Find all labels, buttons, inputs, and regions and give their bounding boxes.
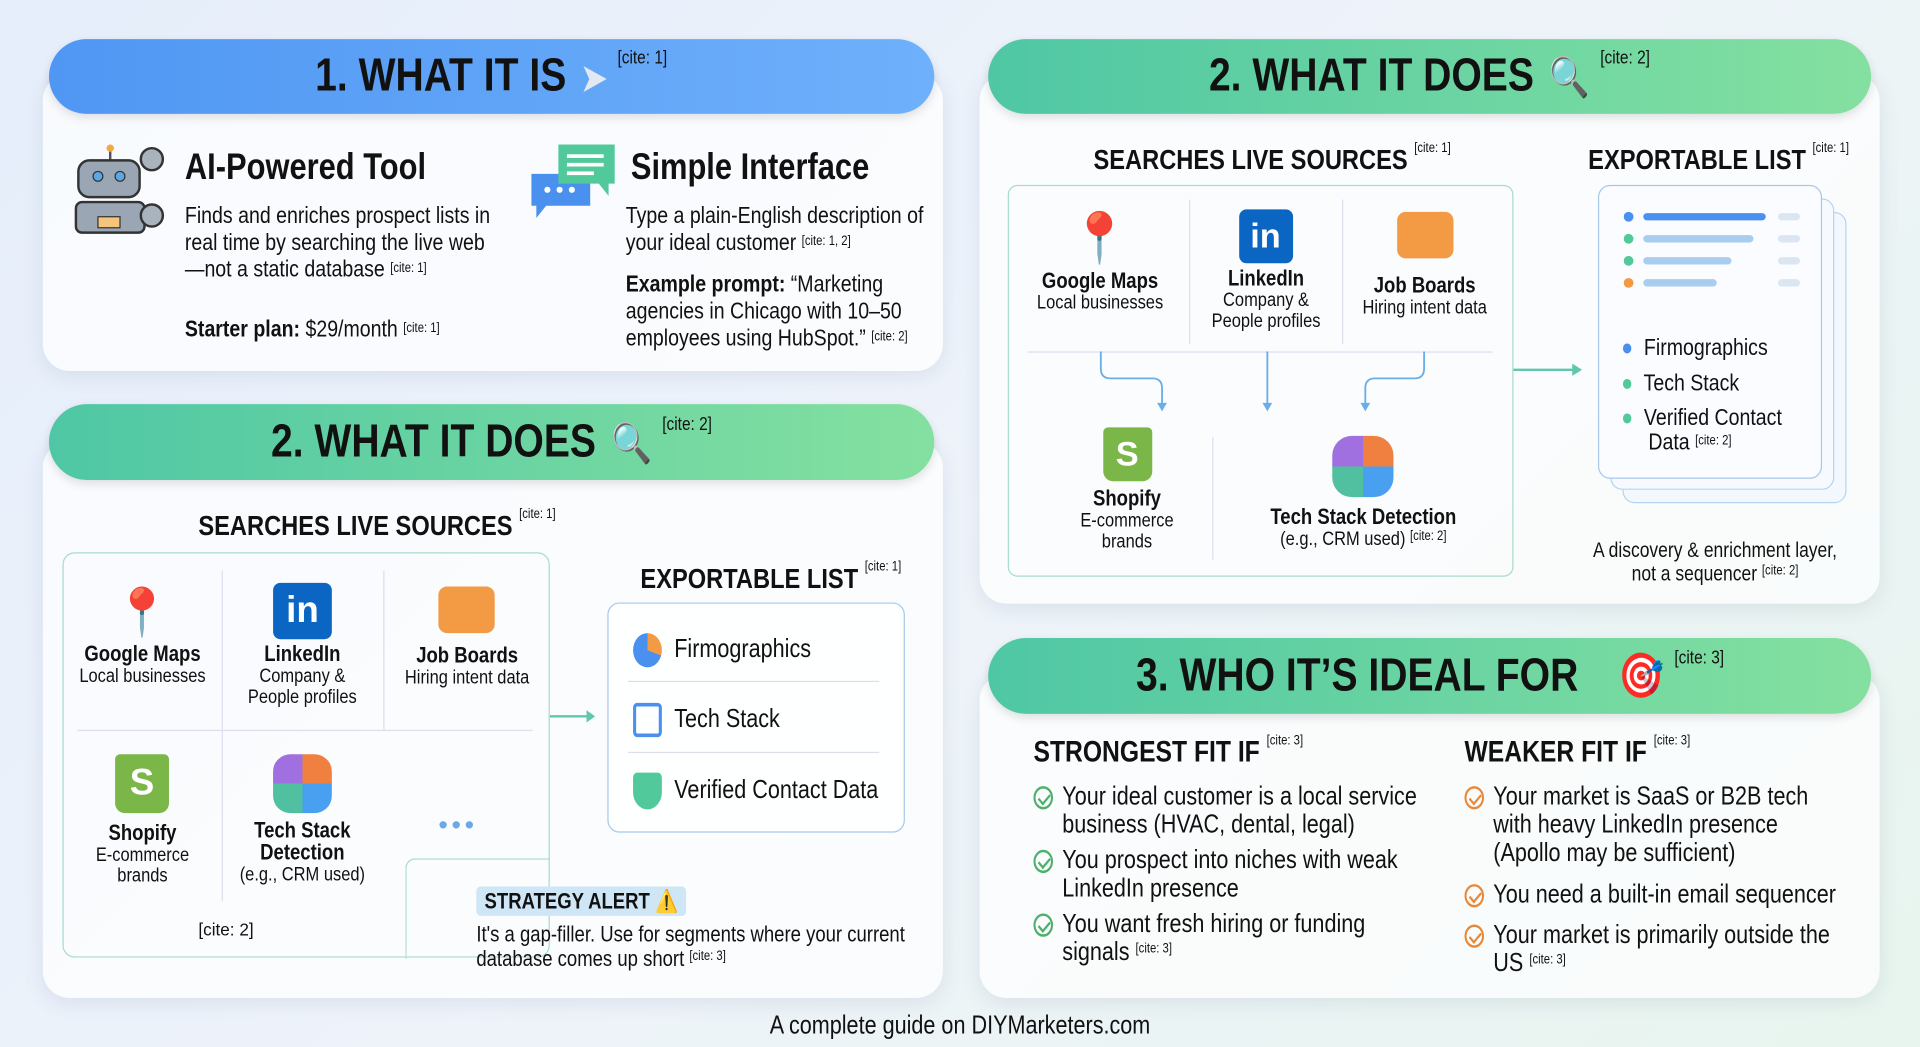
arrow: to list (right)	[1514, 364, 1582, 376]
text: ai-powered tool	[184, 147, 490, 343]
source: google maps	[79, 586, 205, 687]
heading: searches live sources (right): SEARCHES LIVE SOURCES [cite: 1]	[1093, 141, 1451, 175]
item: verified contact data: Verified Contact Data	[674, 776, 878, 804]
source: google maps: 📍	[1069, 212, 1130, 266]
text: simple interface	[626, 147, 924, 351]
arrows: down flow	[1100, 352, 1425, 412]
source: shopify: S	[130, 763, 154, 803]
heading: 1. what it is: 1. WHAT IT IS ➤ [cite: 1]	[316, 48, 668, 102]
heading: 2. what it does (left): 2. WHAT IT DOES 🔍 [cite: 2]	[271, 413, 712, 467]
source: shopify	[1081, 427, 1174, 552]
heading: 2. what it does (right)	[988, 39, 1871, 114]
column: strongest fit: STRONGEST FIT IF [cite: 3]	[1033, 733, 1303, 769]
text: ai-powered tool: Starter plan: $29/month [cite: 1]	[185, 317, 440, 343]
column: weaker fit: Your market is SaaS or B2B tech with heavy LinkedIn presence (Apollo may be sufficient)	[1493, 782, 1808, 867]
column: strongest fit: Your ideal customer is a local service business (HVAC, dental, legal)	[1062, 782, 1417, 839]
panel: what it does (left)	[43, 441, 943, 998]
source: linkedin: in	[1250, 217, 1281, 255]
column: weaker fit	[1464, 733, 1836, 977]
column: weaker fit: You need a built-in email sequencer	[1493, 880, 1836, 909]
text: simple interface: Simple Interface	[631, 147, 869, 187]
item: firmographics: Firmographics	[674, 635, 811, 663]
arrow: to exportable list	[550, 710, 595, 722]
text: ai-powered tool: AI-Powered Tool	[185, 147, 426, 187]
heading: 3. who it's ideal for: 3. WHO IT’S IDEAL FOR 🎯 [cite: 3]	[1136, 647, 1724, 701]
source: shopify: E-commerce	[1081, 511, 1174, 531]
column: strongest fit: You want fresh hiring or funding signals [cite: 3]	[1062, 910, 1365, 966]
source: job boards: Job Boards	[1374, 273, 1476, 298]
source: shopify: E-commerce	[95, 845, 189, 866]
list items: ● Verified Contact	[1621, 405, 1782, 431]
caption: discovery layer	[1593, 539, 1837, 585]
source: linkedin: LinkedIn	[1227, 266, 1304, 290]
source: tech stack: Tech Stack	[254, 818, 351, 842]
source: google maps: 📍	[113, 588, 171, 639]
source: shopify: Shopify	[1093, 486, 1161, 511]
source: job boards: Hiring intent data	[1362, 298, 1487, 318]
callout: strategy alert	[476, 886, 905, 971]
source: tech stack	[240, 754, 365, 885]
icon: robot	[74, 144, 164, 234]
callout: strategy alert: It's a gap-filler. Use for segments where your current database comes up short [cite: 3]	[476, 922, 905, 971]
text: simple interface: Type a plain-English description of your ideal customer [cite: 1, 2]	[626, 203, 923, 256]
source: tech stack: (e.g., CRM used)	[240, 864, 365, 885]
panel: who it's ideal for	[980, 673, 1880, 998]
source: tech stack detection: Tech Stack Detection	[1270, 504, 1456, 529]
list items	[1621, 336, 1782, 456]
source: linkedin	[248, 582, 357, 708]
source: google maps: Local businesses	[79, 666, 205, 687]
source: linkedin: in	[286, 590, 319, 631]
source: job boards	[404, 586, 530, 688]
source: shopify: S	[1116, 435, 1139, 473]
item: tech stack	[633, 702, 780, 738]
caption: discovery layer: not a sequencer [cite: 2]	[1632, 562, 1799, 585]
column: weaker fit: Your market is primarily outside the US [cite: 3]	[1493, 921, 1830, 977]
source: tech stack: Detection	[260, 840, 345, 864]
heading: 2. what it does (left)	[49, 404, 934, 480]
source: google maps: Google Maps	[84, 642, 200, 666]
column: strongest fit	[1033, 733, 1417, 966]
source: tech stack detection: (e.g., CRM used) [cite: 2]	[1280, 529, 1446, 550]
source: linkedin	[1211, 209, 1320, 332]
more dots: •••	[438, 809, 478, 840]
text: ai-powered tool: Finds and enriches prospect lists in real time by searching the live web—not a static database [cite: 1]	[185, 203, 490, 283]
footer: A complete guide on DIYMarketers.com	[770, 1011, 1150, 1040]
source: shopify: Shopify	[108, 820, 176, 845]
heading: 2. what it does (right): 2. WHAT IT DOES 🔍 [cite: 2]	[1209, 48, 1650, 102]
source: linkedin: People profiles	[1211, 311, 1320, 332]
heading: exportable list (right): EXPORTABLE LIST [cite: 1]	[1588, 141, 1849, 175]
source: linkedin: People profiles	[248, 687, 357, 708]
source: shopify: brands	[117, 866, 167, 887]
list box (left)	[607, 602, 905, 833]
panel: what it does (right)	[980, 73, 1880, 604]
panel: what it is	[43, 73, 943, 371]
heading: searches live sources: SEARCHES LIVE SOURCES [cite: 1]	[198, 507, 556, 541]
item: verified contact data	[633, 772, 878, 810]
source: google maps	[1036, 210, 1163, 313]
text: simple interface: Example prompt: “Marketing agencies in Chicago with 10–50 employees using HubSpot.” [cite: 2]	[626, 272, 908, 351]
source: linkedin: Company &	[259, 666, 345, 687]
source: google maps: Local businesses	[1036, 293, 1163, 313]
item: tech stack: Tech Stack	[674, 705, 780, 733]
source: job boards: Job Boards	[416, 643, 517, 667]
list items: Data [cite: 2]	[1648, 430, 1732, 456]
column: strongest fit: You prospect into niches with weak LinkedIn presence	[1062, 846, 1398, 902]
column: weaker fit: WEAKER FIT IF [cite: 3]	[1465, 733, 1690, 769]
sources grid (left): [cite: 2]	[198, 920, 254, 939]
heading: 1. what it is	[49, 39, 934, 114]
icon: chat bubbles	[531, 144, 615, 218]
connector line	[405, 858, 550, 959]
source: shopify: brands	[1102, 531, 1152, 552]
source: shopify	[95, 754, 189, 887]
caption: discovery layer: A discovery & enrichment layer,	[1594, 539, 1837, 562]
sources grid (left)	[62, 552, 550, 958]
sources flow (right)	[1008, 184, 1514, 577]
source: tech stack detection	[1270, 436, 1456, 550]
list items: ● Firmographics	[1621, 336, 1768, 361]
source: google maps: Google Maps	[1041, 268, 1158, 293]
document stack: exportable list	[1598, 184, 1846, 504]
source: linkedin: LinkedIn	[264, 642, 341, 666]
source: job boards: Hiring intent data	[404, 667, 529, 688]
source: job boards	[1362, 212, 1487, 318]
item: firmographics	[633, 633, 811, 668]
source: linkedin: Company &	[1223, 290, 1309, 311]
list items: ● Tech Stack	[1621, 371, 1739, 397]
heading: 3. who it's ideal for	[988, 638, 1871, 714]
callout: strategy alert: STRATEGY ALERT ⚠️	[485, 889, 678, 913]
heading: exportable list (left): EXPORTABLE LIST [cite: 1]	[640, 560, 901, 594]
